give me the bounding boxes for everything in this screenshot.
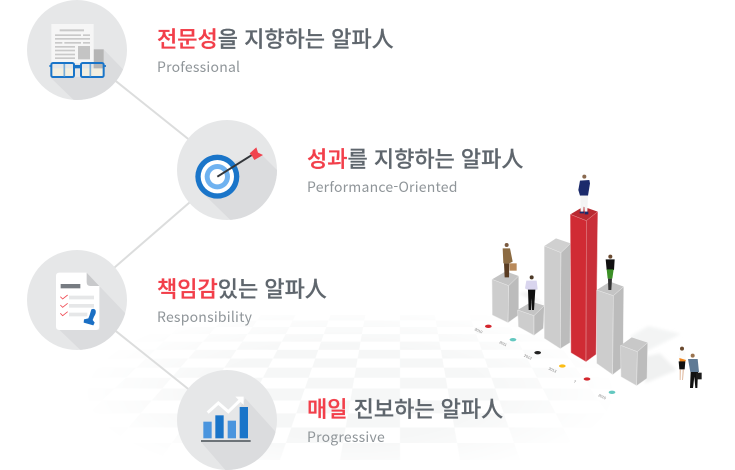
heading: progressive: Progressive (307, 427, 385, 447)
heading: progressive: 매일 진보하는 알파人 (307, 397, 503, 422)
axis markers and labels (474, 325, 615, 400)
heading: responsibility (157, 277, 327, 327)
axis markers and labels: 2015 (598, 393, 607, 400)
heading: performance-oriented (307, 147, 523, 197)
icon: target and arrow (177, 120, 277, 220)
heading: professional: 전문성을 지향하는 알파人 (157, 27, 394, 52)
axis markers and labels: 2012 (523, 354, 532, 361)
heading: professional: Professional (157, 57, 240, 77)
axis markers and labels: 7 (573, 380, 576, 384)
checkered floor (228, 344, 492, 442)
person: black top and green skirt (606, 255, 615, 290)
person: brown suit with case (503, 243, 517, 277)
people: couple at right (679, 347, 702, 388)
person: navy jacket on red bar (578, 175, 590, 214)
heading: professional (157, 27, 394, 77)
heading: performance-oriented: Performance-Oriented (307, 177, 458, 197)
axis markers and labels: 2013 (548, 367, 557, 374)
person: white shirt seen from behind (525, 275, 538, 310)
bar 2 (518, 302, 544, 335)
heading: progressive (307, 397, 503, 447)
bar 6 (621, 337, 648, 386)
axis markers and labels: 2010 (474, 327, 483, 334)
bar 1 (492, 271, 519, 323)
heading: responsibility: 책임감있는 알파人 (157, 277, 327, 302)
bar 5 (597, 282, 624, 375)
axis markers and labels: 2011 (499, 340, 507, 347)
connector lines (77, 50, 227, 420)
heading: responsibility: Responsibility (157, 307, 253, 327)
bar 3 (544, 238, 571, 349)
icon: newspaper and glasses (27, 0, 127, 100)
3D bar chart with people (474, 175, 702, 400)
icon: rising bar chart (177, 370, 277, 470)
red bar (570, 207, 598, 362)
icon: checklist document with stamp (27, 250, 127, 350)
heading: performance-oriented: 성과를 지향하는 알파人 (307, 147, 523, 172)
